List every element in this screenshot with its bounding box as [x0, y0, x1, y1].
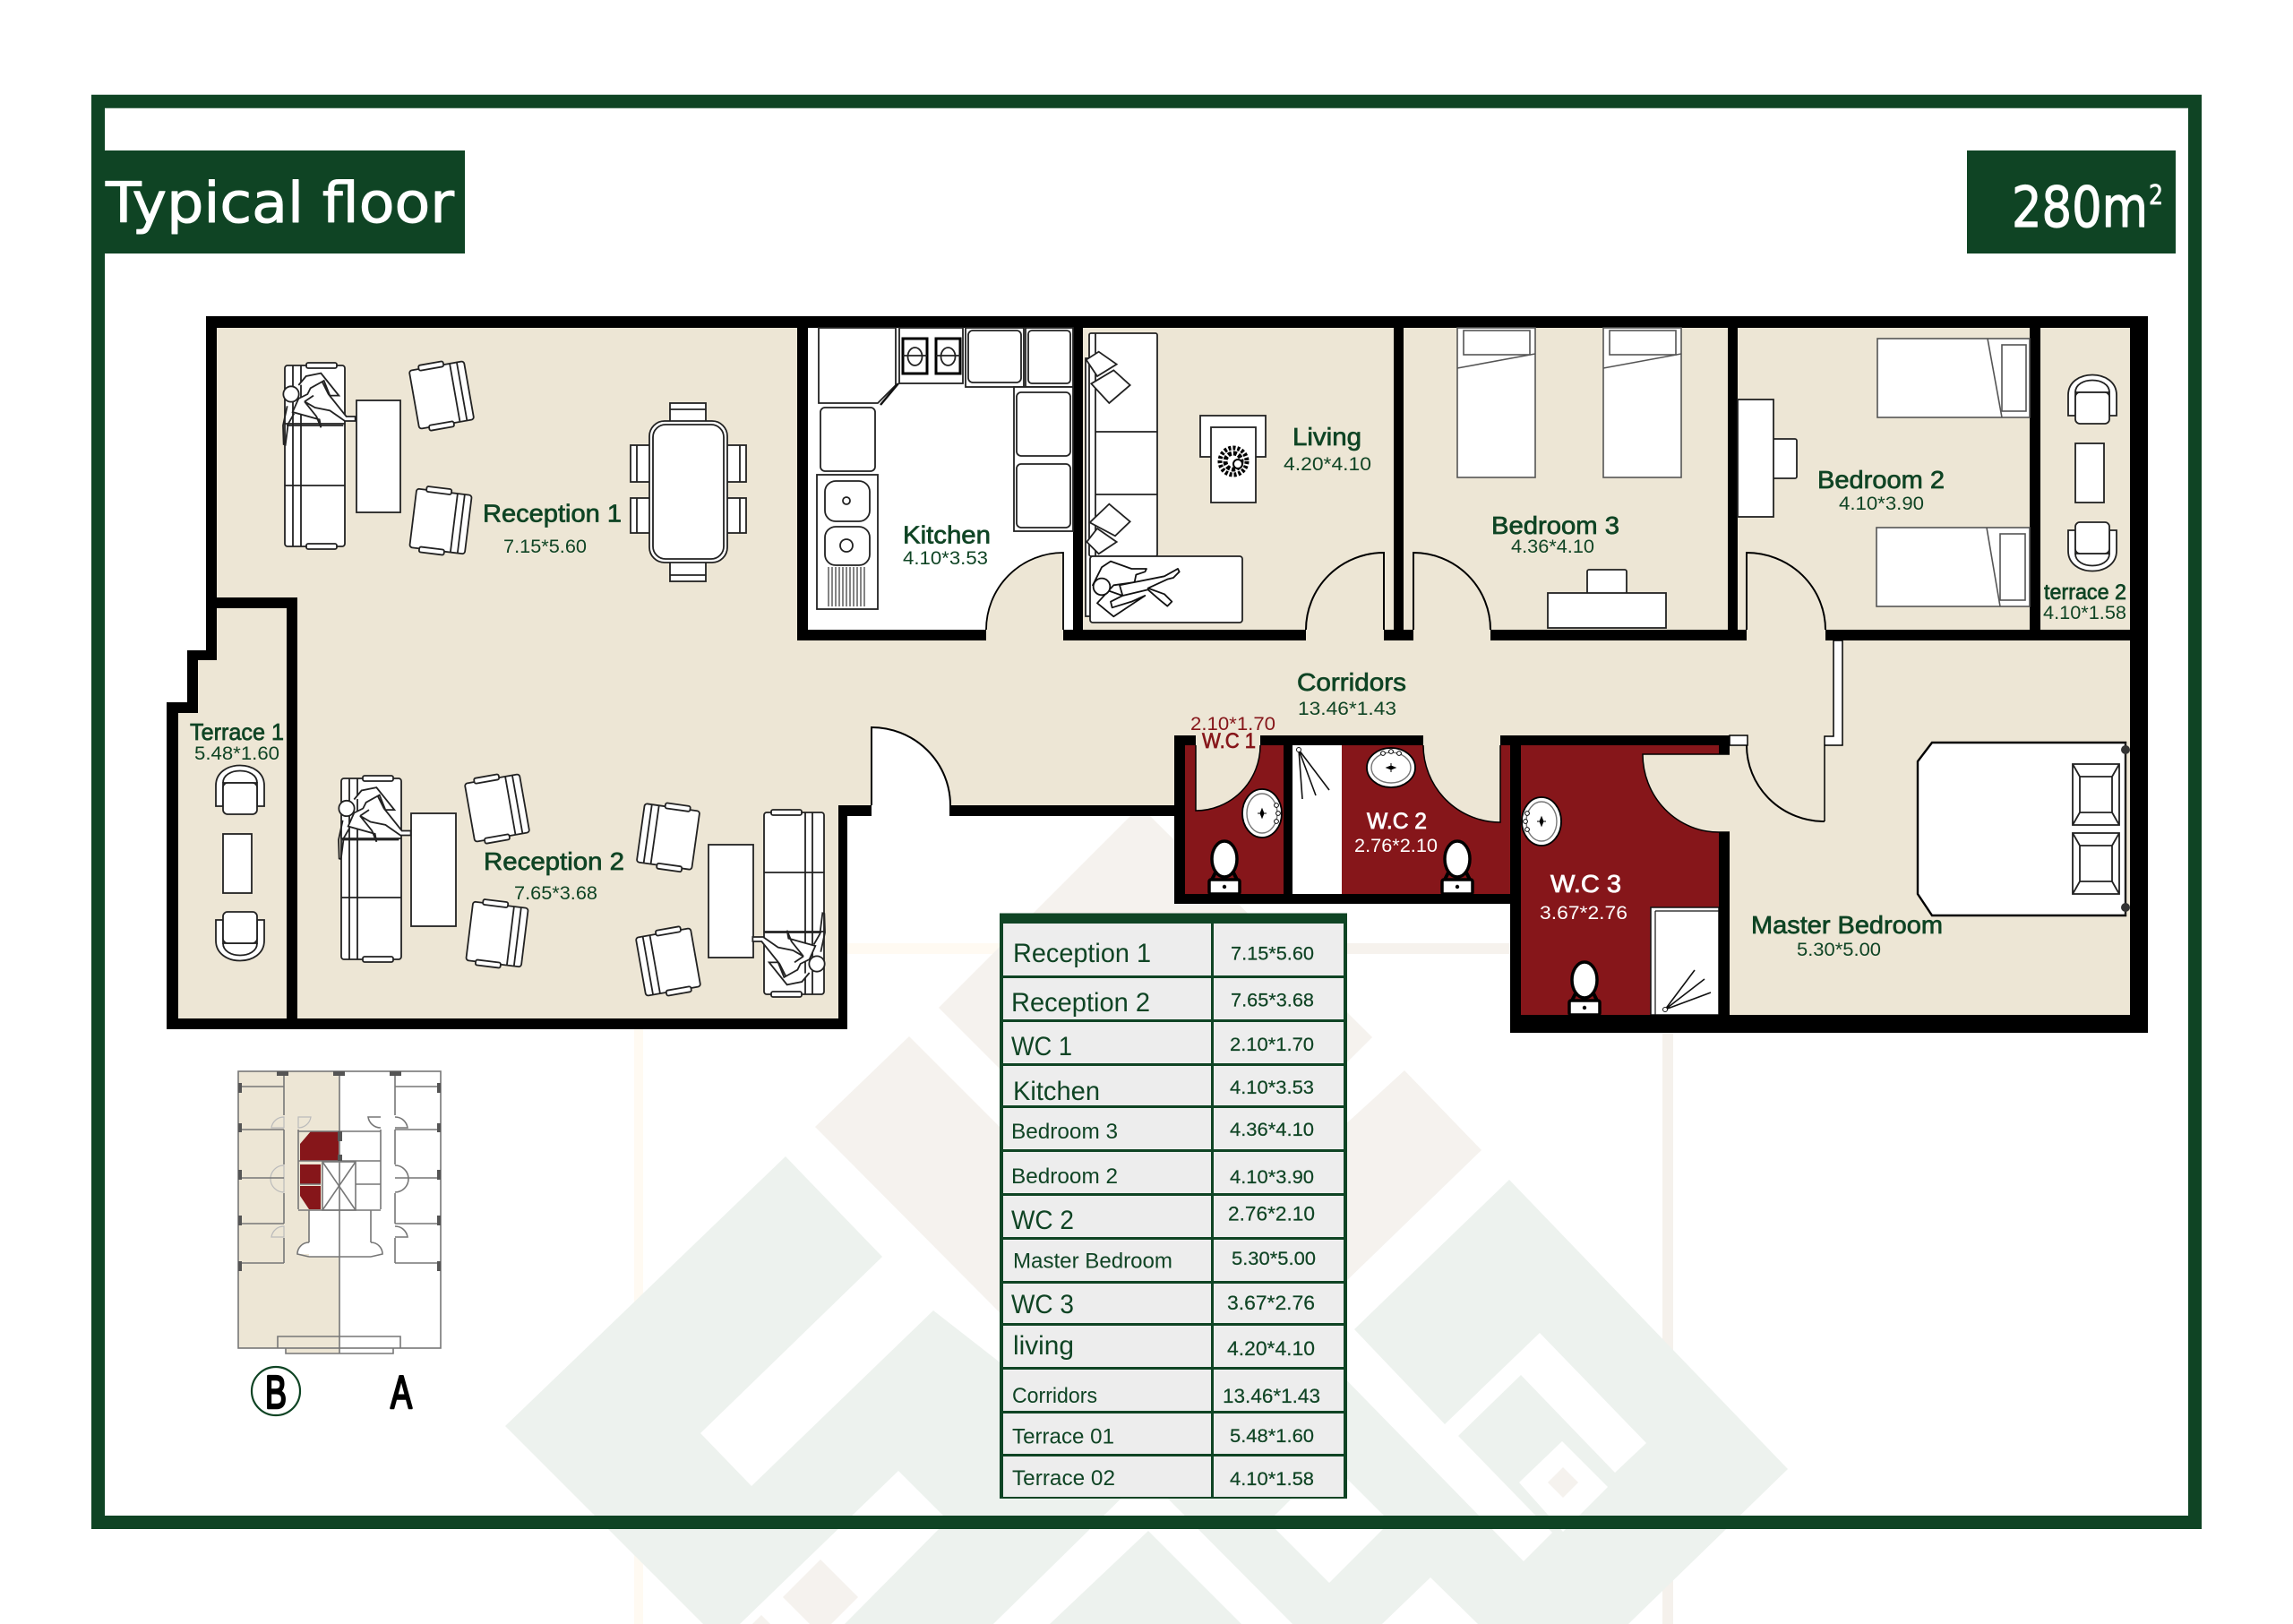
row: Master Bedroom: 5.30*5.00: [1232, 1249, 1316, 1269]
row: WC 1: WC 1: [1011, 1032, 1072, 1061]
furniture: terrace 1: [216, 765, 264, 960]
room label: W.C 2: 2.76*2.10: [1354, 836, 1438, 856]
sink: [817, 475, 878, 609]
shower in WC 3: [1651, 907, 1719, 1015]
row: Reception 2: [1003, 978, 1344, 1019]
desk: [1738, 400, 1773, 517]
terrace table: [2075, 443, 2104, 503]
door swing: master bedroom: [1825, 640, 1842, 821]
person on sofa: [283, 374, 356, 445]
row: Reception 2: 7.65*3.68: [1231, 991, 1314, 1011]
row: WC 3: [1003, 1284, 1344, 1323]
room label: W.C 1: 2.10*1.70: [1190, 714, 1275, 735]
terrace chair: [216, 765, 264, 814]
row: Corridors: [1003, 1370, 1344, 1411]
row: Master Bedroom: [1003, 1240, 1344, 1281]
room label: terrace 2: terrace 2: [2044, 580, 2126, 605]
row: Bedroom 3: 4.36*4.10: [1230, 1120, 1314, 1140]
coffee table: [356, 400, 400, 512]
small wall niche: [1730, 735, 1748, 745]
row: Corridors: 13.46*1.43: [1223, 1385, 1320, 1407]
cushions: [1086, 352, 1130, 554]
unit marker A: A: [391, 1367, 412, 1419]
furniture: reception 1: [283, 357, 746, 581]
left sofa: [341, 776, 401, 962]
row: Kitchen: 4.10*3.53: [1230, 1078, 1314, 1098]
room label: W.C 1: [1190, 714, 1275, 753]
room label: W.C 1: W.C 1: [1202, 729, 1256, 753]
furniture: bedroom 3: [1457, 328, 1681, 628]
furniture: kitchen: [817, 328, 1073, 609]
area badge: 280m2: 280m: [2012, 175, 2148, 240]
room label: Terrace 1: 5.48*1.60: [194, 743, 279, 764]
row: Kitchen: Kitchen: [1013, 1077, 1100, 1106]
bed: [1877, 339, 2030, 417]
basin: [1522, 797, 1561, 846]
row: Bedroom 3: [1003, 1108, 1344, 1149]
room label: Reception 2: [484, 847, 624, 904]
toilet: [1209, 841, 1240, 894]
room label: W.C 3: W.C 3: [1550, 870, 1621, 898]
row: Bedroom 2: [1003, 1152, 1344, 1193]
room label: Bedroom 3: 4.36*4.10: [1511, 537, 1594, 557]
armchair: [635, 924, 701, 1000]
unit marker B: B: [265, 1367, 287, 1419]
bed: [1603, 328, 1681, 477]
sofa: [285, 363, 345, 549]
room label: Master Bedroom: [1751, 911, 1943, 960]
dining table and chairs: [631, 403, 746, 581]
door swing: bedroom 2: [1747, 553, 1825, 630]
room label: W.C 3: 3.67*2.76: [1540, 903, 1627, 924]
door arc: master bedroom: [1747, 745, 1825, 821]
armchair: [636, 800, 700, 873]
room label: terrace 2: [2043, 580, 2126, 623]
terrace chair: [2068, 374, 2117, 424]
unit marker B: [252, 1367, 300, 1419]
room label: W.C 2: [1354, 809, 1438, 856]
row: Kitchen: [1003, 1066, 1344, 1106]
row: Bedroom 2: 4.10*3.90: [1230, 1167, 1314, 1188]
basin: [1367, 748, 1415, 787]
room label: Kitchen: Kitchen: [903, 521, 991, 548]
corner counter: [819, 328, 898, 405]
highlighted wet rooms: [300, 1131, 339, 1209]
title badge: Typical floor: Typical floor: [105, 170, 455, 236]
table frame: [1000, 914, 1347, 1499]
room label: Master Bedroom: 5.30*5.00: [1797, 940, 1881, 960]
row: WC 3: WC 3: [1011, 1290, 1074, 1319]
desk chair: [1587, 570, 1627, 595]
floor area: [178, 328, 2130, 1018]
room label: Bedroom 3: Bedroom 3: [1491, 511, 1619, 539]
room label: Living: [1284, 423, 1371, 475]
room label: Bedroom 2: Bedroom 2: [1817, 466, 1945, 494]
floor plan: [167, 316, 2148, 1033]
room label: W.C 3: [1540, 870, 1627, 924]
key plan: [238, 1071, 441, 1353]
bed: [1876, 528, 2030, 606]
basin: [1242, 789, 1282, 838]
room label: Reception 1: Reception 1: [483, 500, 622, 527]
armchair: [466, 898, 528, 971]
side table with plant: [1200, 416, 1266, 503]
door swing: bedroom 3: [1413, 553, 1490, 630]
person on right sofa: [752, 913, 825, 984]
row: WC 1: 2.10*1.70: [1230, 1035, 1314, 1055]
left coffee table: [411, 813, 456, 926]
row: WC 2: WC 2: [1011, 1206, 1074, 1235]
furniture: master bed: [1918, 743, 2130, 915]
furniture: terrace 2: [2068, 374, 2117, 571]
row: Terrace 02: Terrace 02: [1012, 1466, 1115, 1491]
lobby and lift core: [297, 1162, 382, 1257]
pillow: [2073, 764, 2119, 825]
door swing: WC 1: [1196, 735, 1260, 811]
room label: Reception 2: Reception 2: [484, 847, 624, 875]
room label: Corridors: Corridors: [1297, 668, 1406, 696]
room label: W.C 2: W.C 2: [1367, 809, 1427, 834]
room label: Living: 4.20*4.10: [1284, 454, 1371, 475]
room label: Terrace 1: [190, 718, 284, 764]
row: living: [1003, 1326, 1344, 1367]
room label: terrace 2: 4.10*1.58: [2043, 603, 2126, 623]
toilet: [1569, 962, 1600, 1015]
room label: Reception 2: 7.65*3.68: [514, 883, 597, 904]
terrace chair: [2068, 522, 2117, 571]
furniture: reception 2: [339, 770, 825, 1000]
fixtures: WC 2: [1367, 748, 1473, 894]
row: WC 2: 2.76*2.10: [1228, 1203, 1315, 1225]
room label: Corridors: 13.46*1.43: [1298, 699, 1396, 719]
terrace chair: [216, 912, 264, 960]
room label: Reception 1: [483, 500, 622, 557]
room label: Master Bedroom: Master Bedroom: [1751, 911, 1943, 939]
row: Bedroom 2: Bedroom 2: [1011, 1164, 1118, 1189]
room label: Bedroom 2: 4.10*3.90: [1839, 494, 1924, 514]
armchair: [464, 770, 530, 846]
wet room floors: [1185, 745, 1719, 1015]
room label: Bedroom 3: [1491, 511, 1619, 557]
row: Terrace 02: [1003, 1456, 1344, 1497]
area badge: 280m2: 2: [2149, 180, 2163, 211]
key plan walls: [238, 1071, 441, 1353]
row: Corridors: Corridors: [1012, 1384, 1097, 1408]
cabinets: [820, 328, 1073, 531]
door swing: entrance: [872, 727, 950, 805]
room label: Corridors: [1297, 668, 1406, 719]
right sofa: [764, 810, 824, 997]
row: Bedroom 3: Bedroom 3: [1011, 1120, 1118, 1144]
area table: [1000, 914, 1347, 1499]
row: living: 4.20*4.10: [1227, 1337, 1315, 1360]
person on left sofa: [339, 787, 411, 859]
pillow: [2073, 833, 2119, 894]
row: Terrace 01: Terrace 01: [1012, 1424, 1114, 1449]
desk: [1548, 593, 1666, 628]
sectional sofa: [1086, 333, 1242, 623]
room label: Terrace 1: Terrace 1: [190, 718, 284, 745]
walls: [167, 316, 2148, 1033]
door bumps: [271, 1117, 311, 1237]
watermark pattern: [505, 806, 1788, 1624]
armchair: [408, 357, 475, 433]
room label: Kitchen: 4.10*3.53: [903, 548, 988, 569]
door swing: WC 2: [1423, 735, 1500, 822]
shower in WC 2: [1292, 745, 1342, 894]
room label: Kitchen: [903, 521, 991, 569]
row: Terrace 01: [1003, 1413, 1344, 1454]
title badge: Typical floor: [99, 150, 465, 253]
bed: [1457, 328, 1535, 477]
room label: Bedroom 2: [1817, 466, 1945, 514]
row: WC 1: [1003, 1022, 1344, 1063]
person on chaise: [1093, 562, 1180, 616]
desk chair: [1772, 439, 1797, 478]
furniture: bedroom 2: [1738, 339, 2030, 606]
door swing: kitchen: [986, 553, 1063, 640]
row: Reception 1: 7.15*5.60: [1231, 944, 1314, 965]
toilet: [1442, 841, 1473, 894]
stove: [899, 328, 963, 383]
highlighted unit B: [238, 1071, 339, 1353]
kitchen floor: [808, 328, 1073, 631]
armchair: [409, 485, 472, 558]
fixtures: WC 1: [1209, 789, 1282, 894]
key plan columns: [238, 1071, 441, 1271]
row: Reception 1: Reception 1: [1013, 939, 1151, 968]
terrace table: [223, 834, 252, 893]
door swing: living: [1306, 553, 1384, 630]
right coffee table: [709, 845, 753, 958]
row: Terrace 01: 5.48*1.60: [1230, 1426, 1314, 1447]
fixtures: WC 3: [1522, 797, 1600, 1015]
row: WC 3: 3.67*2.76: [1227, 1292, 1315, 1314]
row: Reception 1: [1003, 924, 1344, 975]
row: living: living: [1013, 1331, 1074, 1361]
furniture: living: [1086, 333, 1266, 623]
door swing: WC 3: [1643, 754, 1730, 832]
row: WC 2: [1003, 1196, 1344, 1237]
area badge: 280m2: [1967, 150, 2176, 253]
room label: Living: Living: [1292, 423, 1361, 451]
row: Reception 2: Reception 2: [1011, 988, 1150, 1018]
room label: Reception 1: 7.15*5.60: [503, 537, 587, 557]
row: Master Bedroom: Master Bedroom: [1013, 1249, 1172, 1274]
row: Terrace 02: 4.10*1.58: [1230, 1469, 1314, 1490]
